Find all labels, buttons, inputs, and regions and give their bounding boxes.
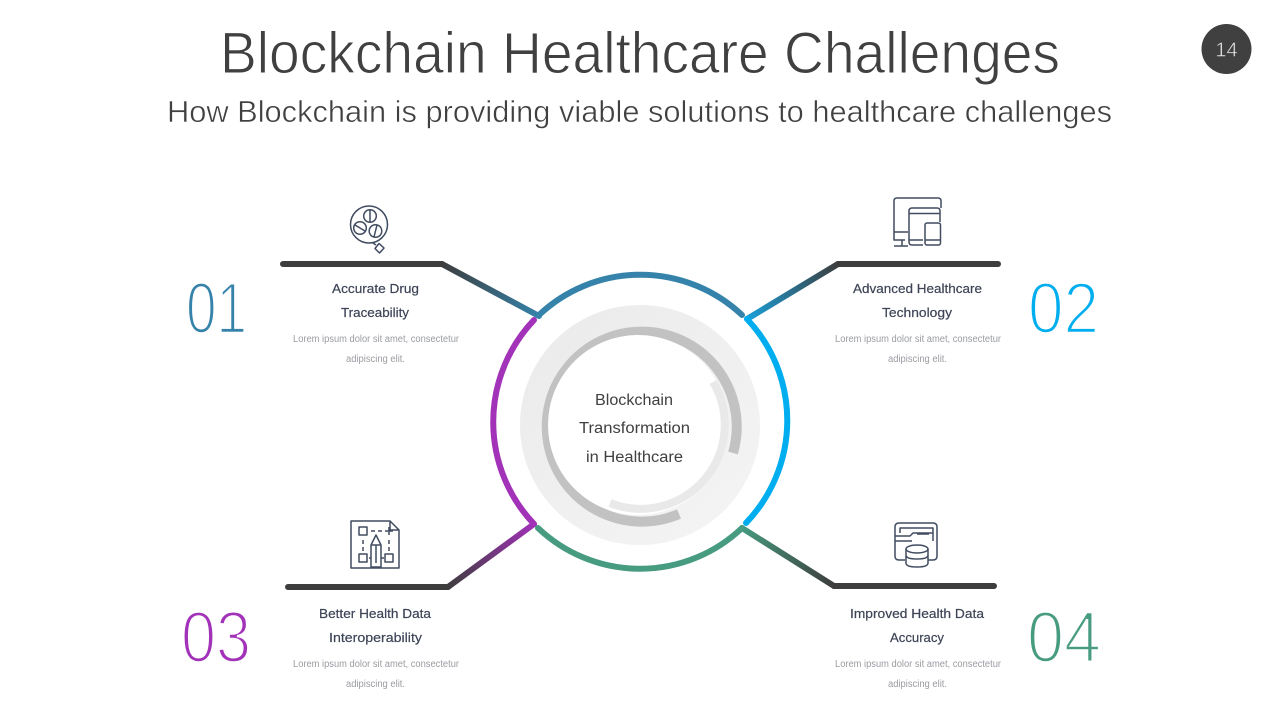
title: Blockchain Healthcare Challenges	[220, 21, 1060, 86]
text block 03: Interoperability	[329, 630, 423, 645]
page number badge: 14	[1215, 40, 1238, 62]
icon: pills under magnifier	[350, 206, 388, 253]
text block 03	[293, 606, 460, 690]
hub gray ring	[547, 332, 737, 522]
hub disk	[520, 305, 760, 545]
number 04: 04	[1027, 598, 1101, 678]
text block 04: Lorem ipsum dolor sit amet, consectetur	[835, 659, 1002, 670]
text block 02	[835, 281, 1002, 365]
text block 01	[293, 281, 460, 365]
text block 04	[835, 606, 1002, 690]
segment 02 connector and arc	[746, 264, 998, 523]
central hub	[520, 305, 760, 545]
icon: folder with database	[895, 523, 937, 567]
text block 03: Lorem ipsum dolor sit amet, consectetur	[293, 659, 460, 670]
text block 03: adipiscing elit.	[346, 679, 405, 690]
segment 03 connector and arc	[288, 320, 534, 587]
segment 01 connector and arc	[283, 264, 742, 316]
hub label	[579, 392, 690, 466]
text block 01: Lorem ipsum dolor sit amet, consectetur	[293, 334, 460, 345]
hub label: Transformation	[579, 420, 690, 437]
number 03: 03	[181, 598, 251, 678]
subtitle: How Blockchain is providing viable solutions to healthcare challenges	[167, 94, 1112, 129]
text block 02: Lorem ipsum dolor sit amet, consectetur	[835, 334, 1002, 345]
text block 04: adipiscing elit.	[888, 679, 947, 690]
text block 01: Traceability	[341, 305, 410, 320]
text block 01: adipiscing elit.	[346, 354, 405, 365]
icon: devices	[894, 198, 941, 246]
hub light arc	[610, 382, 725, 509]
text block 02: Technology	[882, 305, 953, 320]
hub label: in Healthcare	[586, 449, 683, 466]
text block 04: Accuracy	[890, 630, 944, 645]
text block 02: adipiscing elit.	[888, 354, 947, 365]
number 01: 01	[186, 269, 247, 349]
text block 01: Accurate Drug	[332, 281, 419, 296]
hub white centre	[548, 335, 728, 515]
number 02: 02	[1028, 269, 1099, 349]
text block 04: Improved Health Data	[850, 606, 985, 621]
icon: blueprint with pencil	[351, 521, 399, 568]
hub label: Blockchain	[595, 392, 673, 409]
page number badge	[1202, 24, 1252, 74]
text block 03: Better Health Data	[319, 606, 432, 621]
segment 04 connector and arc	[538, 528, 994, 586]
text block 02: Advanced Healthcare	[853, 281, 982, 296]
